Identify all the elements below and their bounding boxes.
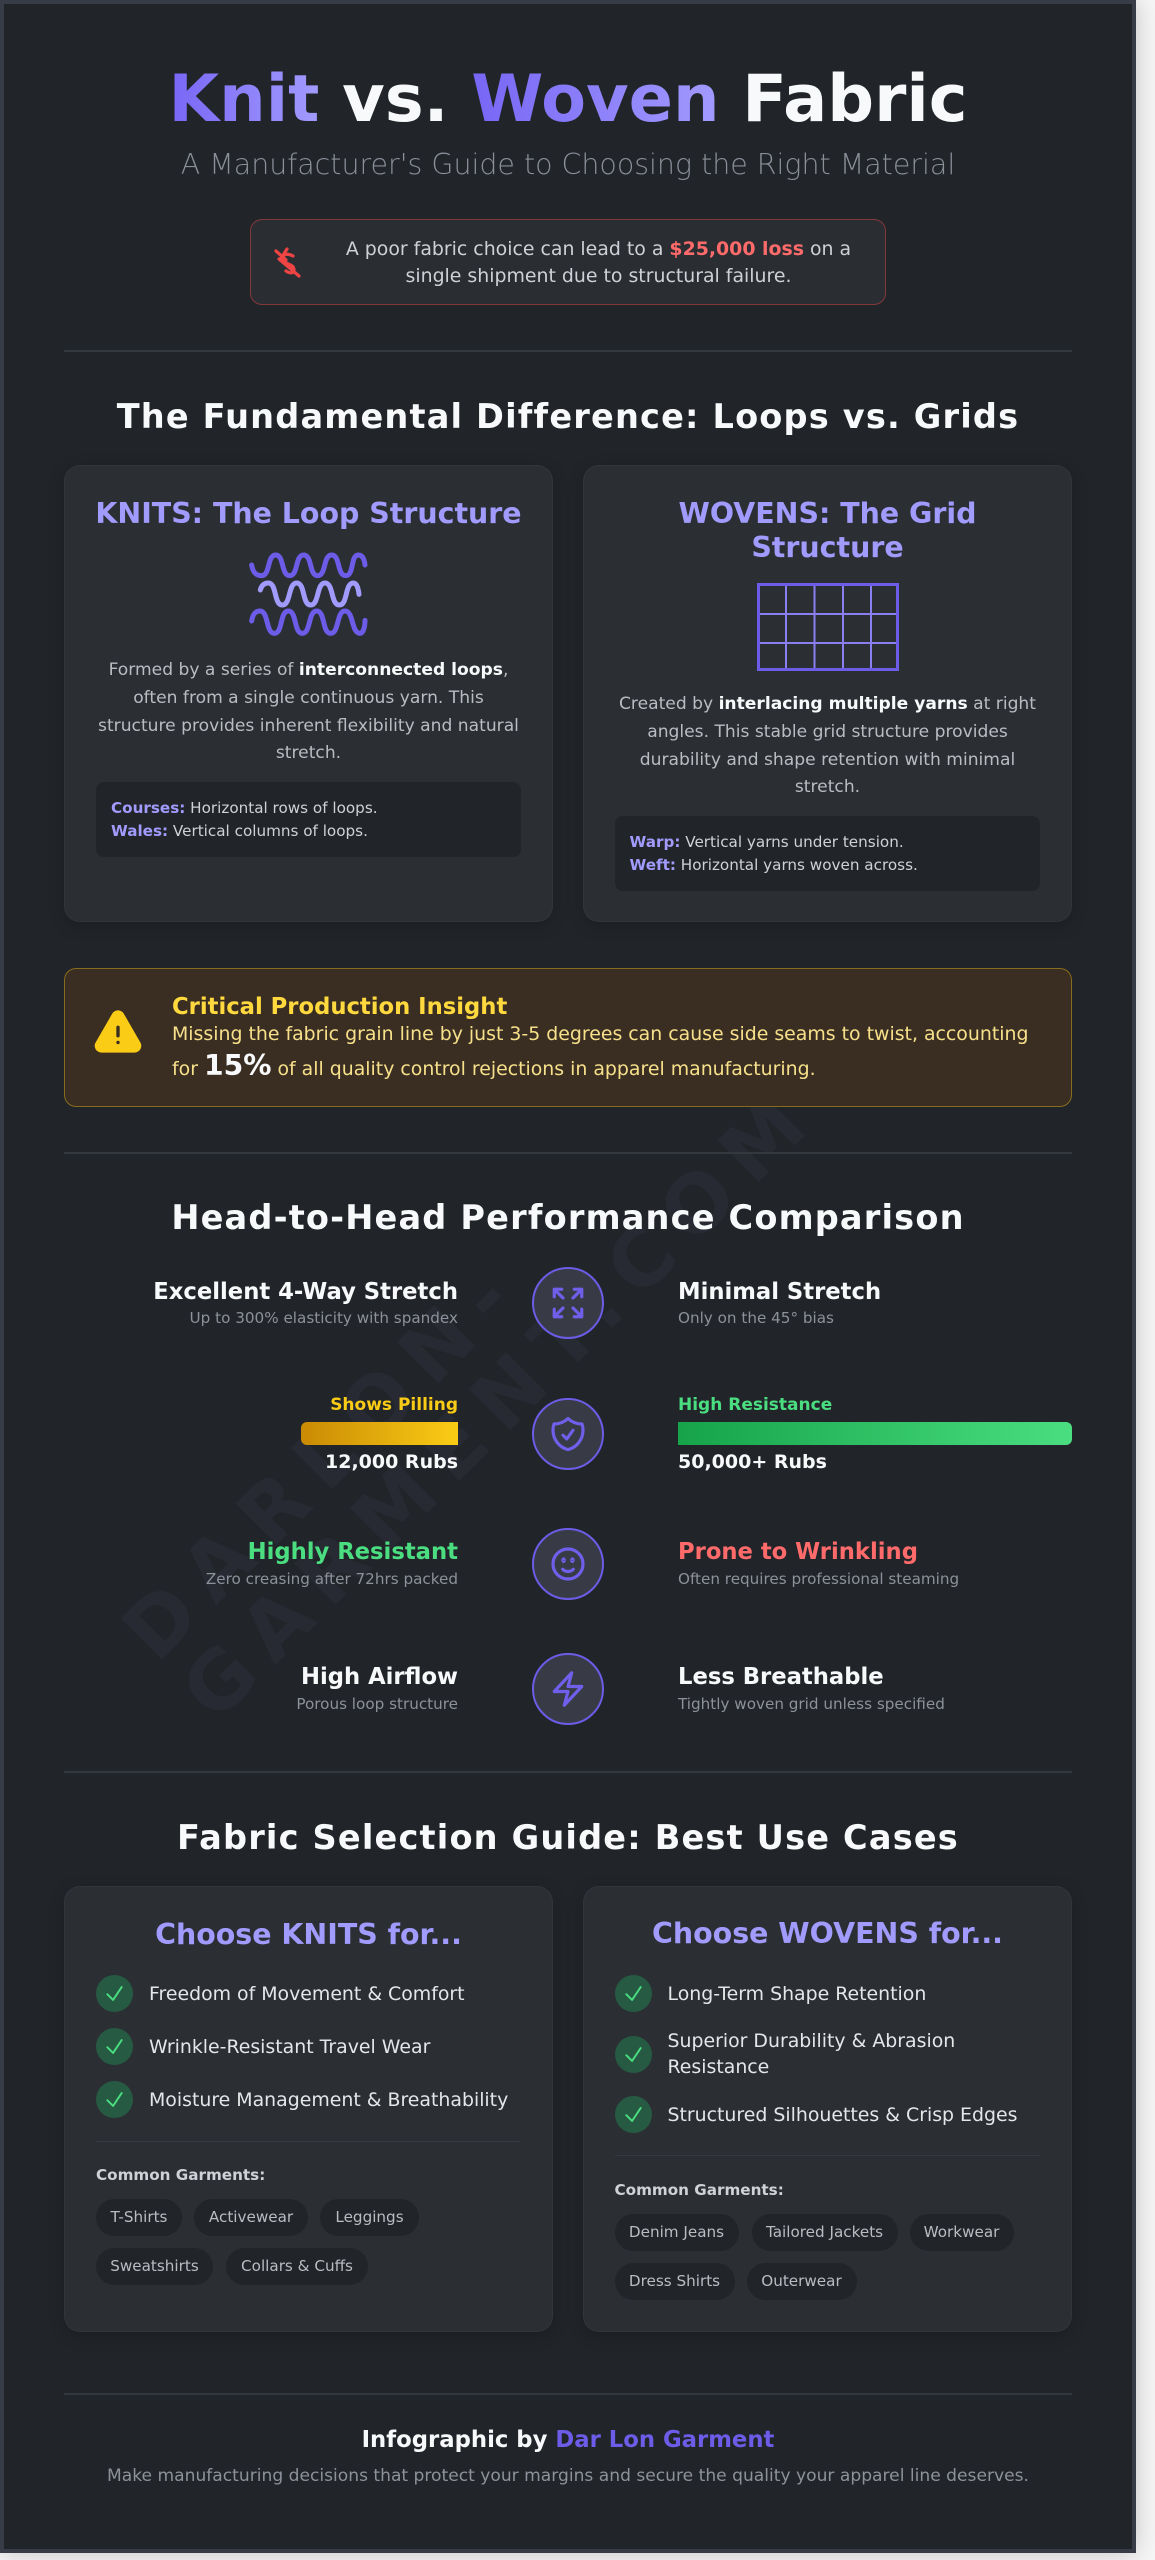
check icon — [96, 2081, 133, 2118]
use case: moisture — [96, 2081, 508, 2118]
icon: crossed dollar — [274, 247, 301, 278]
tag — [96, 2199, 182, 2236]
wovens description: stretch. — [795, 777, 860, 797]
comparison row: wrinkles — [206, 1528, 959, 1600]
knit airflow detail: Porous loop structure — [296, 1695, 458, 1713]
common garments label: Common Garments: — [96, 2166, 265, 2184]
wovens description: durability and shape retention with minimal — [640, 750, 1015, 770]
tag — [752, 2214, 898, 2251]
tag — [910, 2214, 1014, 2251]
knits definitions: Courses: Horizontal rows of loops. — [111, 799, 378, 817]
use case: movement — [96, 1975, 465, 2012]
footer credit: Infographic by Dar Lon Garment — [362, 2427, 774, 2453]
tag: Sweatshirts — [110, 2257, 199, 2275]
check icon — [614, 2036, 652, 2073]
insight heading: Critical Production Insight — [172, 994, 507, 1020]
icon: knit loops — [249, 552, 368, 636]
panel: choose wovens — [583, 1886, 1072, 2332]
tag: T-Shirts — [111, 2208, 167, 2226]
tag: Dress Shirts — [629, 2272, 720, 2290]
check icon — [96, 2028, 133, 2065]
garment tags — [615, 2214, 1014, 2300]
heading: performance comparison: Head-to-Head Performance Comparison — [171, 1198, 965, 1237]
knit abrasion bar — [301, 1422, 458, 1445]
use case text: Resistance — [668, 2056, 769, 2078]
knit stretch detail: Up to 300% elasticity with spandex — [190, 1309, 458, 1327]
icon: woven grid — [757, 583, 899, 671]
heading: selection guide: Fabric Selection Guide: Best Use Cases — [177, 1818, 959, 1857]
panel: choose knits — [64, 1886, 553, 2332]
panel: knits — [64, 465, 553, 922]
wovens heading: Structure — [751, 531, 904, 564]
woven airflow: Less Breathable — [678, 1664, 884, 1690]
woven airflow detail: Tightly woven grid unless specified — [678, 1695, 945, 1713]
callout: loss warning — [250, 219, 886, 305]
check icon — [614, 2096, 652, 2133]
alert text: A poor fabric choice can lead to a $25,000 loss on a — [346, 238, 851, 260]
use case text: Freedom of Movement & Comfort — [149, 1983, 465, 2005]
knit airflow: High Airflow — [301, 1664, 458, 1690]
use case: wrinkle — [96, 2028, 430, 2065]
insight text: for 15% of all quality control rejections in apparel manufacturing. — [172, 1049, 816, 1082]
alert text: single shipment due to structural failure. — [406, 265, 791, 287]
tag: Tailored Jackets — [766, 2223, 883, 2241]
woven stretch: Minimal Stretch — [678, 1279, 881, 1305]
knits definitions — [96, 782, 521, 857]
icon: shield — [532, 1398, 604, 1470]
wovens description — [619, 694, 1036, 797]
heading: fundamental difference: The Fundamental Difference: Loops vs. Grids — [117, 397, 1019, 436]
watermark: DARLON- — [104, 1241, 542, 1678]
use case: silhouettes — [615, 2096, 1017, 2133]
check icon — [614, 1975, 652, 2012]
icon: bolt — [532, 1653, 604, 1725]
tag: Workwear — [924, 2223, 999, 2241]
footer tagline: Make manufacturing decisions that protect your margins and secure the quality your apparel line deserves. — [107, 2466, 1029, 2486]
woven resistance label: High Resistance — [678, 1395, 832, 1415]
alert text — [346, 238, 851, 287]
knit pilling label: Shows Pilling — [330, 1395, 458, 1415]
comparison row: stretch — [153, 1267, 881, 1339]
icon: warning triangle — [94, 1010, 142, 1053]
comparison row: breathability — [296, 1653, 945, 1725]
tag — [194, 2199, 308, 2236]
title: Knit vs. Woven Fabric — [168, 61, 968, 137]
tag: Activewear — [209, 2208, 293, 2226]
woven abrasion bar — [678, 1422, 1072, 1445]
knit wrinkle detail: Zero creasing after 72hrs packed — [206, 1570, 458, 1588]
use case: durability — [615, 2030, 955, 2078]
use case text: Long-Term Shape Retention — [668, 1983, 926, 2005]
knits heading: KNITS: The Loop Structure — [95, 497, 522, 530]
panel: wovens — [583, 465, 1072, 922]
woven stretch detail: Only on the 45° bias — [678, 1309, 834, 1327]
tag — [226, 2248, 368, 2285]
insight text — [172, 1023, 1028, 1082]
knits description: Formed by a series of interconnected loops, — [109, 660, 508, 680]
woven wrinkle: Prone to Wrinkling — [678, 1539, 918, 1565]
tag — [96, 2248, 213, 2285]
knit stretch: Excellent 4-Way Stretch — [153, 1279, 458, 1305]
choose knits heading: Choose KNITS for... — [155, 1918, 462, 1950]
subtitle: A Manufacturer's Guide to Choosing the Right Material — [181, 148, 955, 181]
tag — [746, 2263, 856, 2300]
wovens definitions — [614, 816, 1040, 891]
wovens definitions: Weft: Horizontal yarns woven across. — [630, 856, 918, 874]
use case text: Structured Silhouettes & Crisp Edges — [668, 2104, 1017, 2126]
tag — [320, 2199, 419, 2236]
watermark: GARMENT.COM — [164, 1066, 835, 1738]
tag — [614, 2214, 738, 2251]
use case: shape — [615, 1975, 926, 2012]
wovens heading — [678, 497, 977, 564]
wovens heading: WOVENS: The Grid — [678, 497, 977, 530]
knits description — [98, 660, 519, 763]
icon: smile — [532, 1528, 604, 1600]
tag: Leggings — [335, 2208, 404, 2226]
use case text: Moisture Management & Breathability — [149, 2089, 508, 2111]
wovens definitions: Warp: Vertical yarns under tension. — [630, 833, 904, 851]
knits description: stretch. — [276, 743, 341, 763]
tag: Collars & Cuffs — [241, 2257, 353, 2275]
knits definitions: Wales: Vertical columns of loops. — [111, 822, 368, 840]
tag: Denim Jeans — [629, 2223, 724, 2241]
wovens description: angles. This stable grid structure provides — [647, 722, 1008, 742]
check icon — [96, 1975, 133, 2012]
callout: critical production insight — [64, 968, 1072, 1107]
comparison row: abrasion — [301, 1395, 1072, 1473]
woven wrinkle detail: Often requires professional steaming — [678, 1570, 959, 1588]
common garments label: Common Garments: — [614, 2181, 784, 2199]
use case text: Superior Durability & Abrasion — [668, 2030, 955, 2052]
tag: Outerwear — [761, 2272, 842, 2290]
woven rubs: 50,000+ Rubs — [678, 1451, 827, 1473]
icon: stretch arrows — [532, 1267, 604, 1339]
tag — [614, 2263, 734, 2300]
use case text — [668, 2030, 955, 2078]
wovens description: Created by interlacing multiple yarns at right — [619, 694, 1036, 714]
knit wrinkle: Highly Resistant — [248, 1539, 458, 1565]
knits description: structure provides inherent flexibility and natural — [98, 716, 519, 736]
knit rubs: 12,000 Rubs — [325, 1451, 458, 1473]
garment tags — [96, 2199, 419, 2285]
knits description: often from a single continuous yarn. This — [133, 688, 484, 708]
insight text: Missing the fabric grain line by just 3-5 degrees can cause side seams to twist, accounting — [172, 1023, 1028, 1045]
use case text: Wrinkle-Resistant Travel Wear — [149, 2036, 430, 2058]
choose wovens heading: Choose WOVENS for... — [652, 1917, 1003, 1950]
